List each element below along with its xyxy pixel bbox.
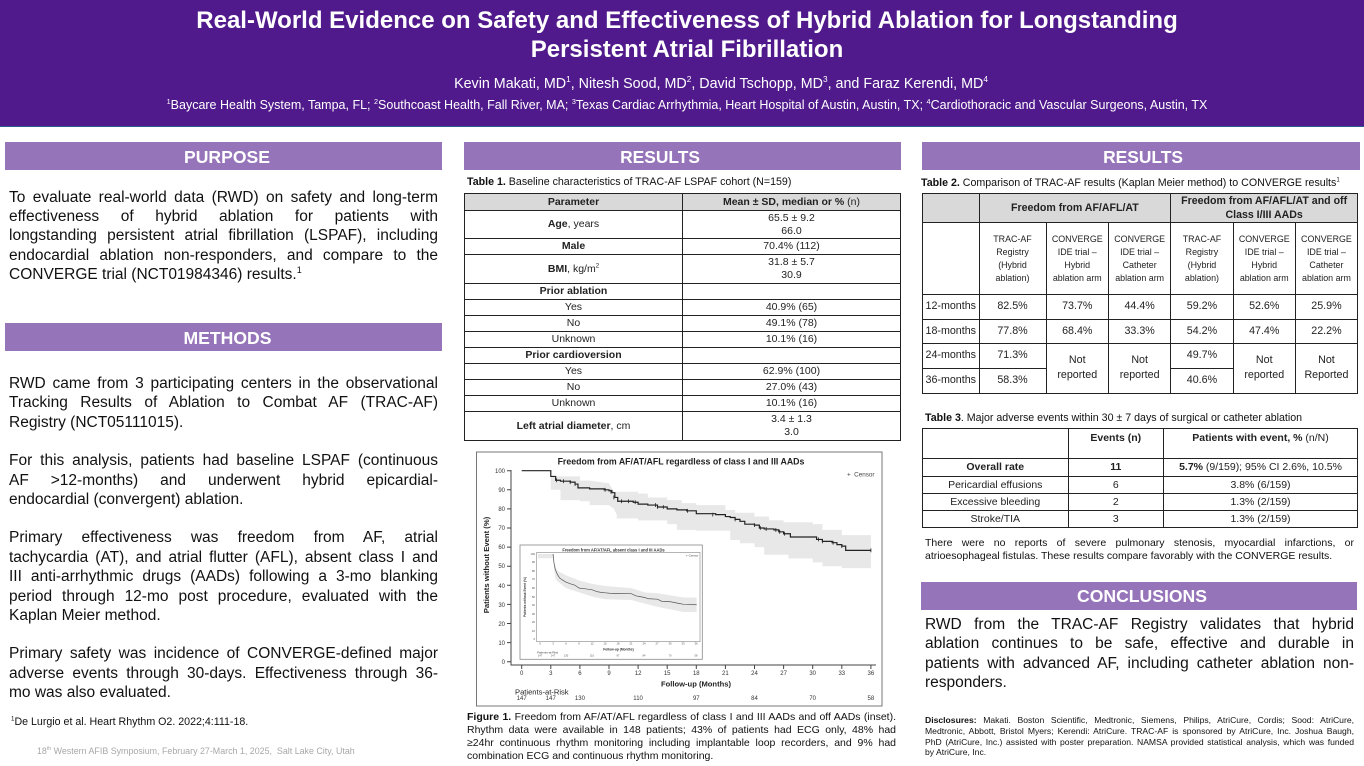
table 1: 62.9% (100) bbox=[763, 365, 820, 377]
inset chart: 58 bbox=[695, 654, 698, 658]
y axis labels bbox=[495, 469, 506, 666]
inset chart: 100 bbox=[530, 552, 535, 556]
methods text: Primary effectiveness was freedom from AF, atrial bbox=[9, 529, 438, 546]
methods text: Primary safety was incidence of CONVERGE-defined major bbox=[9, 645, 438, 662]
table 3: 3.8% (6/159) bbox=[1230, 478, 1291, 490]
table 2: 58.3% bbox=[997, 374, 1028, 386]
table 1: No bbox=[567, 381, 580, 393]
conclusions text: responders. bbox=[925, 674, 1007, 691]
x axis labels: 12 bbox=[635, 671, 642, 677]
confidence band and survival curve bbox=[522, 471, 871, 568]
table 2: Registry bbox=[1186, 246, 1218, 256]
inset chart: 70 bbox=[532, 577, 535, 581]
figure 1 caption: Figure 1. Freedom from AF/AT/AFL regardless of class I and III AADs and off AADs (inset). bbox=[467, 710, 896, 722]
table 2: reported bbox=[1120, 369, 1160, 381]
table 2: 12-months bbox=[926, 300, 976, 312]
table 3: 5.7% (9/159); 95% CI 2.6%, 10.5% bbox=[1179, 461, 1342, 473]
figure 1 caption: combination ECG and continuous rhythm monitoring. bbox=[467, 750, 713, 762]
inset chart: + Censor bbox=[686, 554, 698, 558]
x axis labels: 33 bbox=[838, 671, 846, 677]
table 1: 40.9% (65) bbox=[766, 301, 817, 313]
table 2: Not bbox=[1318, 354, 1335, 366]
inset chart: 12 bbox=[590, 642, 594, 646]
heading: purpose: PURPOSE bbox=[184, 147, 270, 167]
table 1: Parameter bbox=[548, 196, 599, 208]
figure 1 caption: ≥24hr continuous rhythm monitoring including implantable loop recorders, and 9% had bbox=[467, 736, 896, 748]
authors: Kevin Makati, MD1, Nitesh Sood, MD2, David Tschopp, MD3, and Faraz Kerendi, MD4 bbox=[454, 74, 988, 92]
x axis labels: 18 bbox=[693, 671, 700, 677]
table 3: Overall rate bbox=[966, 461, 1024, 473]
table 1: 31.8 ± 5.7 bbox=[768, 256, 815, 268]
heading: results middle: RESULTS bbox=[620, 147, 700, 167]
figure 1 survival chart: + Censor bbox=[847, 472, 874, 478]
table 2: 33.3% bbox=[1124, 325, 1155, 337]
methods text: Kaplan Meier method. bbox=[9, 607, 161, 624]
patients at risk: 84 bbox=[751, 696, 758, 702]
figure 1 survival chart: Freedom from AF/AT/AFL regardless of class I and III AADs bbox=[558, 456, 805, 466]
patients at risk: 147 bbox=[517, 696, 527, 702]
table 2: TRAC-AF bbox=[1183, 234, 1221, 244]
inset chart: 3 bbox=[552, 642, 554, 646]
inset chart: 147 bbox=[538, 654, 543, 658]
disclosures: PhD (AtriCure, Inc.) assisted with poster preparation. NAMSA provided statistical analysis, which was funded bbox=[925, 737, 1354, 747]
methods text: AF >12-months) and underwent hybrid epicardial- bbox=[9, 472, 438, 489]
table 2: ablation arm bbox=[1302, 272, 1351, 282]
figure 1 survival chart bbox=[476, 452, 882, 706]
table 2: IDE trial – bbox=[1307, 246, 1346, 256]
table 2: 59.2% bbox=[1187, 300, 1217, 312]
inset chart: Patients-at-Risk bbox=[537, 650, 559, 654]
table 1: Prior ablation bbox=[540, 285, 607, 297]
x axis labels: 0 bbox=[520, 671, 524, 677]
x axis labels: 36 bbox=[868, 671, 875, 677]
purpose text: To evaluate real-world data (RWD) on safety and long-term bbox=[9, 188, 438, 206]
inset chart: 30 bbox=[668, 642, 672, 646]
patients at risk: 110 bbox=[633, 696, 644, 702]
table 1: 30.9 bbox=[781, 269, 802, 281]
table 2: Not bbox=[1069, 354, 1086, 366]
patients at risk: 97 bbox=[693, 696, 700, 702]
x axis labels: 24 bbox=[751, 671, 758, 677]
table 2: 24-months bbox=[926, 349, 976, 361]
table 2: CONVERGE bbox=[1052, 234, 1103, 244]
disclosures: Disclosures: Makati. Boston Scientific, Medtronic, Siemens, Philips, AtriCure, Cordis; Sood: AtriCure, bbox=[925, 715, 1354, 725]
table 2: Catheter bbox=[1309, 260, 1343, 270]
figure 1 survival chart: Follow-up (Months) bbox=[661, 680, 731, 688]
table 2: 40.6% bbox=[1187, 374, 1217, 386]
table 3: Pericardial effusions bbox=[948, 478, 1042, 490]
y axis labels: 90 bbox=[498, 488, 506, 494]
table 2: Catheter bbox=[1123, 260, 1157, 270]
heading: methods bbox=[5, 323, 442, 351]
table 2: Class I/III AADs bbox=[1225, 209, 1303, 221]
disclosures bbox=[925, 715, 1354, 757]
inset chart: 97 bbox=[617, 654, 620, 658]
inset chart: 24 bbox=[642, 642, 646, 646]
disclosures: by AtriCure, Inc. bbox=[925, 747, 986, 757]
table 2: 71.3% bbox=[997, 349, 1028, 361]
table 1: Unknown bbox=[552, 333, 595, 345]
table 1: BMI, kg/m2 bbox=[548, 262, 599, 274]
table 2: ablation) bbox=[995, 272, 1030, 282]
inset chart: Freedom from AF/AT/AFL absent class I and III AADs bbox=[562, 547, 665, 552]
inset chart: 15 bbox=[603, 642, 607, 646]
table 3 caption: Table 3. Major adverse events within 30 ± 7 days of surgical or catheter ablation bbox=[925, 412, 1302, 424]
table 3: 1.3% (2/159) bbox=[1230, 512, 1291, 524]
purpose text: longstanding persistent atrial fibrillation (LSPAF), including bbox=[9, 227, 438, 244]
x axis labels bbox=[520, 671, 875, 677]
conclusions text: RWD from the TRAC-AF Registry validates that hybrid bbox=[925, 616, 1354, 633]
inset chart: 70 bbox=[669, 654, 672, 658]
heading: results right bbox=[922, 142, 1360, 170]
inset chart: 20 bbox=[532, 620, 535, 624]
inset chart: 6 bbox=[565, 642, 567, 646]
inset chart bbox=[520, 545, 702, 659]
figure 1 survival chart: Patients-at-Risk bbox=[515, 688, 569, 696]
y axis labels: 70 bbox=[498, 526, 506, 532]
purpose text bbox=[9, 188, 438, 283]
table 1: Unknown bbox=[552, 397, 595, 409]
patients at risk bbox=[517, 696, 875, 702]
table 3 bbox=[922, 428, 1358, 528]
table 2: Hybrid bbox=[1064, 260, 1090, 270]
heading: purpose bbox=[5, 142, 442, 170]
table 2: 82.5% bbox=[997, 300, 1028, 312]
table 2: Freedom from AF/AFL/AT bbox=[1011, 202, 1139, 214]
patients at risk: 130 bbox=[575, 696, 586, 702]
table 1 bbox=[464, 193, 901, 441]
table 2: 77.8% bbox=[997, 325, 1028, 337]
table 2: (Hybrid bbox=[1188, 260, 1216, 270]
table 2: reported bbox=[1244, 369, 1284, 381]
heading: conclusions: CONCLUSIONS bbox=[1077, 586, 1207, 606]
table 1: Age, years bbox=[548, 218, 599, 230]
inset chart: 10 bbox=[532, 629, 535, 633]
table 1 caption: Table 1. Baseline characteristics of TRAC-AF LSPAF cohort (N=159) bbox=[467, 176, 791, 188]
methods text: Tracking Results of Ablation to Combat AF (TRAC-AF) bbox=[9, 394, 438, 411]
y axis labels: 80 bbox=[498, 507, 506, 513]
inset chart: 40 bbox=[532, 603, 535, 607]
y axis labels: 50 bbox=[498, 564, 506, 570]
table 3: 1.3% (2/159) bbox=[1230, 496, 1291, 508]
inset chart: 50 bbox=[532, 595, 535, 599]
table 2 bbox=[922, 193, 1358, 394]
table 3: 3 bbox=[1113, 512, 1119, 524]
x axis labels: 30 bbox=[809, 671, 817, 677]
table 2: 36-months bbox=[926, 374, 976, 386]
conference note: 18th Western AFIB Symposium, February 27-March 1, 2025, Salt Lake City, Utah bbox=[37, 746, 355, 756]
table 2: 18-months bbox=[926, 325, 976, 337]
methods text: period through 12-mo post procedure, evaluated with the bbox=[9, 588, 438, 605]
table 3: Excessive bleeding bbox=[950, 496, 1040, 508]
table 2: TRAC-AF bbox=[993, 234, 1032, 244]
patients at risk: 70 bbox=[809, 696, 817, 702]
table 1: 66.0 bbox=[781, 224, 802, 236]
table 2 caption: Table 2. Comparison of TRAC-AF results (Kaplan Meier method) to CONVERGE results1 bbox=[921, 176, 1340, 188]
inset chart: 33 bbox=[681, 642, 685, 646]
conclusions text bbox=[925, 616, 1354, 691]
disclosures: Medtronic, Abbott, Bristol Myers; Kerendi: AtriCure. TRAC-AF is sponsored by AtriCure, Inc. Joshua Baugh, bbox=[925, 726, 1354, 736]
purpose text: endocardial ablation non-responders, and compare to the bbox=[9, 247, 438, 264]
table 2: Hybrid bbox=[1251, 260, 1277, 270]
conclusions text: ablation continues to be safe, effective and durable in bbox=[925, 635, 1354, 652]
methods text: Registry (NCT05111015). bbox=[9, 414, 183, 431]
inset chart: 84 bbox=[643, 654, 646, 658]
x axis labels: 27 bbox=[780, 671, 788, 677]
table 1: 3.0 bbox=[784, 426, 799, 438]
inset chart: 18 bbox=[616, 642, 620, 646]
x axis labels: 9 bbox=[607, 671, 611, 677]
title: Persistent Atrial Fibrillation bbox=[531, 36, 843, 63]
table 2: 47.4% bbox=[1249, 325, 1279, 337]
table 3: 6 bbox=[1113, 478, 1119, 490]
table 2: 49.7% bbox=[1187, 349, 1217, 361]
table 1: 3.4 ± 1.3 bbox=[771, 413, 812, 425]
table 1: Male bbox=[562, 240, 585, 252]
methods text: tachycardia (AT), and atrial flutter (AFL), absent class I and bbox=[9, 549, 438, 566]
table 1: 65.5 ± 9.2 bbox=[768, 212, 815, 224]
y axis labels: 20 bbox=[498, 622, 506, 628]
heading: methods: METHODS bbox=[184, 328, 271, 348]
inset chart: 60 bbox=[532, 586, 535, 590]
methods text: mo was also evaluated. bbox=[9, 684, 171, 701]
table 2: 73.7% bbox=[1062, 300, 1092, 312]
inset chart: 80 bbox=[532, 569, 535, 573]
table 3: Patients with event, % (n/N) bbox=[1192, 432, 1329, 444]
table 3: Events (n) bbox=[1090, 432, 1141, 444]
table 2: CONVERGE bbox=[1301, 234, 1352, 244]
table 1: 49.1% (78) bbox=[766, 317, 817, 329]
table 2: ablation) bbox=[1185, 272, 1219, 282]
methods text: For this analysis, patients had baseline LSPAF (continuous bbox=[9, 452, 438, 469]
methods text: adverse events through 30-days. Effectiveness through 36- bbox=[9, 665, 438, 682]
figure 1 caption bbox=[467, 710, 896, 762]
y axis labels: 0 bbox=[502, 660, 506, 666]
inset chart: 90 bbox=[532, 560, 535, 564]
methods text: III anti-arrhythmic drugs (AADs) following a 3-mo blanking bbox=[9, 568, 438, 585]
title bbox=[196, 7, 1178, 63]
x axis labels: 15 bbox=[664, 671, 671, 677]
table 1: 70.4% (112) bbox=[763, 240, 820, 252]
table 2: (Hybrid bbox=[998, 260, 1027, 270]
table 1: Yes bbox=[565, 365, 582, 377]
methods text: endocardial (convergent) ablation. bbox=[9, 491, 243, 508]
inset chart: 27 bbox=[655, 642, 659, 646]
table 3: 11 bbox=[1110, 461, 1121, 473]
y axis labels: 40 bbox=[498, 584, 506, 590]
heading: conclusions bbox=[921, 582, 1357, 610]
table 2: reported bbox=[1057, 369, 1097, 381]
table 2: 22.2% bbox=[1311, 325, 1342, 337]
table 3: Stroke/TIA bbox=[970, 512, 1020, 524]
table 1: Mean ± SD, median or % (n) bbox=[723, 196, 860, 208]
table 2: CONVERGE bbox=[1239, 234, 1290, 244]
inset chart: 30 bbox=[532, 612, 535, 616]
y axis labels: 10 bbox=[498, 641, 506, 647]
header banner bbox=[0, 0, 1364, 127]
x axis labels: 21 bbox=[722, 671, 729, 677]
table 2: IDE trial – bbox=[1245, 246, 1284, 256]
y axis labels: 100 bbox=[495, 469, 506, 475]
inset chart: 36 bbox=[694, 642, 698, 646]
figure 1 caption: Rhythm data were available in 148 patients; 43% of patients had ECG only, 48% had bbox=[467, 724, 896, 736]
inset chart: Follow-up (Months) bbox=[603, 648, 634, 652]
table 2: ablation arm bbox=[1115, 272, 1164, 282]
conclusions text: patients with advanced AF, including catheter ablation non- bbox=[925, 655, 1354, 672]
x axis labels: 3 bbox=[549, 671, 553, 677]
y axis labels: 30 bbox=[498, 603, 506, 609]
heading: results right: RESULTS bbox=[1103, 147, 1183, 167]
y axis labels: 60 bbox=[498, 545, 506, 551]
table 1: Yes bbox=[565, 301, 582, 313]
table 2: Not bbox=[1131, 354, 1148, 366]
inset chart: 0 bbox=[533, 637, 535, 641]
table 1: Left atrial diameter, cm bbox=[517, 420, 630, 432]
table 2: Not bbox=[1256, 354, 1273, 366]
table 2: IDE trial – bbox=[1120, 246, 1159, 256]
table 2: Freedom from AF/AFL/AT and off bbox=[1181, 195, 1347, 207]
title: Real-World Evidence on Safety and Effectiveness of Hybrid Ablation for Longstanding bbox=[196, 7, 1178, 34]
table 3 note: There were no reports of severe pulmonary stenosis, myocardial infarctions, or bbox=[925, 536, 1354, 548]
methods text bbox=[9, 375, 438, 701]
affiliations: 1Baycare Health System, Tampa, FL; 2Southcoast Health, Fall River, MA; 3Texas Cardiac Arrhythmia, Heart Hospital of Austin, Austin, TX; 4Cardiothoracic and Vascular Surgeons, Austin, TX bbox=[167, 97, 1207, 112]
heading: results middle bbox=[464, 142, 901, 170]
table 3 note bbox=[925, 536, 1354, 562]
table 2: ablation arm bbox=[1053, 272, 1102, 282]
table 2: Registry bbox=[996, 246, 1029, 256]
table 1: 27.0% (43) bbox=[766, 381, 817, 393]
table 2: CONVERGE bbox=[1114, 234, 1165, 244]
inset chart: 147 bbox=[551, 654, 556, 658]
inset chart: 21 bbox=[629, 642, 633, 646]
methods text: RWD came from 3 participating centers in the observational bbox=[9, 375, 438, 392]
axes bbox=[507, 470, 876, 669]
figure 1 survival chart: Patients without Event (%) bbox=[482, 516, 491, 613]
purpose text: CONVERGE trial (NCT01984346) results.1 bbox=[9, 265, 302, 283]
patients at risk: 58 bbox=[868, 696, 875, 702]
table 2: 54.2% bbox=[1187, 325, 1217, 337]
inset chart: 0 bbox=[539, 642, 541, 646]
footnote reference: 1De Lurgio et al. Heart Rhythm O2. 2022;4:111-18. bbox=[11, 715, 248, 728]
table 2: 25.9% bbox=[1311, 300, 1342, 312]
table 2: 44.4% bbox=[1124, 300, 1155, 312]
inset chart: 110 bbox=[590, 654, 595, 658]
purpose text: effectiveness of hybrid ablation for patients with bbox=[9, 208, 438, 225]
table 3: 2 bbox=[1113, 496, 1119, 508]
x axis labels: 6 bbox=[578, 671, 582, 677]
patients at risk: 147 bbox=[546, 696, 556, 702]
inset chart: 130 bbox=[564, 654, 569, 658]
table 1: No bbox=[567, 317, 580, 329]
table 2: ablation arm bbox=[1240, 272, 1289, 282]
table 1: 10.1% (16) bbox=[766, 333, 817, 345]
table 1: Prior cardioversion bbox=[525, 349, 622, 361]
inset chart: Patients without Event (%) bbox=[523, 577, 527, 617]
inset chart: 9 bbox=[578, 642, 580, 646]
table 2: IDE trial – bbox=[1058, 246, 1097, 256]
table 1: 10.1% (16) bbox=[766, 397, 817, 409]
table 2: 52.6% bbox=[1249, 300, 1279, 312]
table 3 note: atrioesophageal fistulas. These results compare favorably with the CONVERGE results. bbox=[925, 550, 1332, 562]
table 2: 68.4% bbox=[1062, 325, 1092, 337]
table 2: Reported bbox=[1304, 369, 1348, 381]
